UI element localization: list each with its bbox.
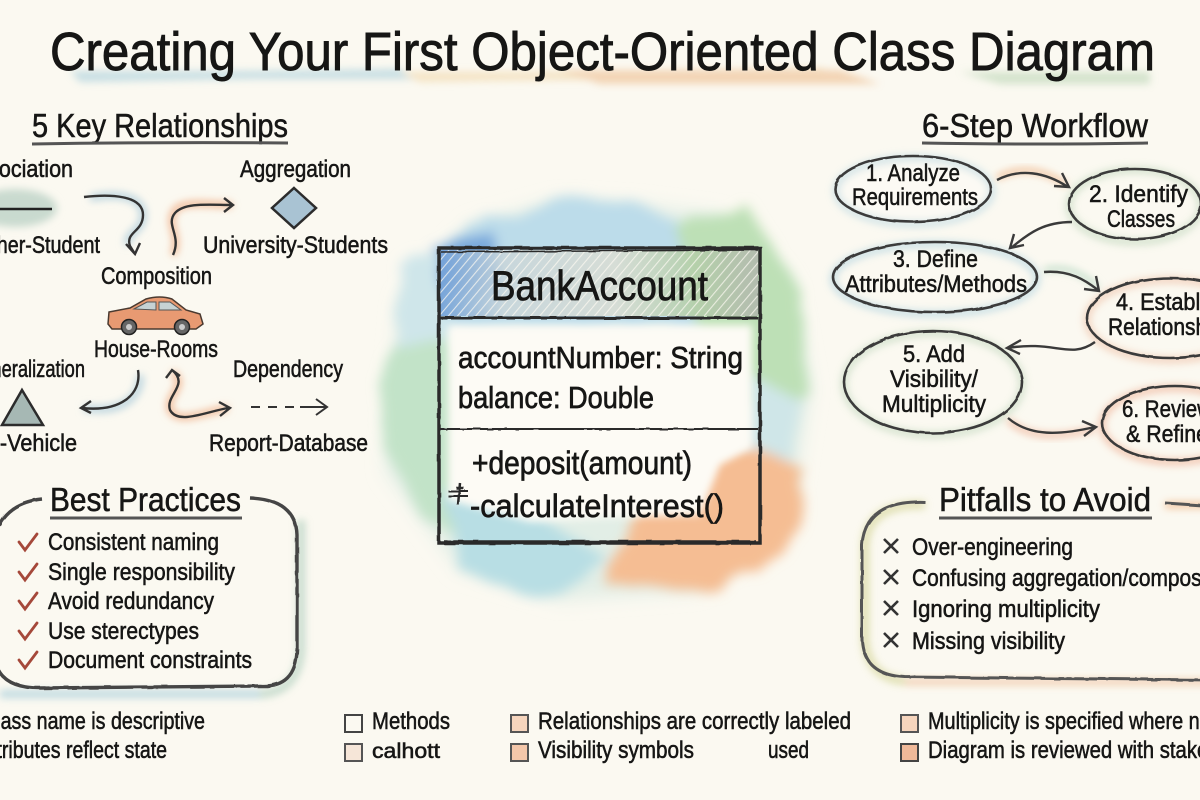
step 2: Classes	[1107, 206, 1175, 233]
checklist column 1	[0, 708, 205, 764]
checklist column 4	[901, 708, 1200, 764]
heading: 6-step workflow: 6-Step Workflow	[922, 107, 1148, 144]
list: best practices: Use sterectypes	[48, 618, 199, 645]
dependency: label and dashed arrow: Dependency	[233, 356, 343, 383]
aggregation: label and diamond: University-Students	[203, 232, 388, 259]
attributes: accountNumber: String	[458, 340, 743, 375]
checklist	[0, 708, 1200, 764]
arrow: step 2 to 3	[1010, 222, 1072, 248]
dependency: label and dashed arrow	[209, 356, 368, 457]
step 6	[1102, 386, 1200, 462]
methods	[470, 445, 724, 524]
step 5: Visibility/	[890, 366, 978, 393]
association: label and line	[0, 156, 100, 259]
methods: +deposit(amount)	[472, 445, 692, 481]
checklist column 2	[345, 708, 450, 763]
arrow: step 3 to 4	[1044, 269, 1099, 291]
arrow: step 5 to 6	[1008, 418, 1096, 436]
arrow: composition to generalization	[81, 370, 140, 413]
composition: label, car icon	[94, 263, 218, 363]
list: best practices: Consistent naming	[48, 529, 219, 556]
step 5: 5. Add	[903, 341, 965, 368]
step 3: 3. Define	[893, 246, 978, 273]
aggregation: label and diamond: Aggregation	[240, 156, 351, 183]
step 1: Requirements	[852, 184, 978, 211]
list: pitfalls	[884, 534, 1200, 655]
list: best practices: Document constraints	[48, 647, 252, 674]
step 5: Multiplicity	[882, 391, 986, 418]
panel: 6-step workflow	[833, 107, 1200, 462]
arrow: step 4 to 5	[1007, 340, 1095, 354]
step 2: 2. Identify	[1089, 181, 1188, 208]
generalization: label and triangle	[0, 356, 85, 457]
step 2	[1069, 169, 1200, 242]
panel: best practices	[0, 481, 301, 694]
step 1	[835, 156, 992, 224]
step 1: 1. Analyze	[866, 160, 960, 187]
checklist column 3: Visibility symbols	[538, 737, 694, 764]
watercolor wash behind class	[382, 198, 810, 600]
methods: -calculateInterest()	[470, 488, 724, 524]
composition: label, car icon: Composition	[101, 263, 212, 290]
class diagram: BankAccount	[439, 248, 760, 543]
list: best practices: Avoid redundancy	[48, 588, 214, 615]
step 5	[844, 331, 1022, 435]
attributes: balance: Double	[458, 380, 654, 415]
list: pitfalls: Ignoring multiplicity	[912, 596, 1100, 623]
checklist column 3: Relationships are correctly labeled	[538, 708, 851, 735]
list: pitfalls: Missing visibility	[912, 628, 1065, 655]
class name: BankAccount	[491, 262, 708, 309]
checklist column 3: used	[768, 737, 809, 764]
checklist column 2: calhott	[372, 740, 440, 763]
arrow: step 1 to 2	[997, 171, 1069, 187]
list: best practices: Single responsibility	[48, 559, 235, 586]
heading: pitfalls to avoid: Pitfalls to Avoid	[939, 481, 1151, 518]
heading: best practices: Best Practices	[50, 481, 241, 518]
heading: 5 key relationships: 5 Key Relationships	[32, 107, 288, 144]
composition: label, car icon: House-Rooms	[94, 336, 218, 363]
arrow: composition to dependency	[166, 370, 230, 417]
panel: 5 key relationships	[0, 107, 388, 457]
list: best practices	[19, 529, 252, 674]
panel: pitfalls to avoid	[862, 481, 1200, 682]
list: pitfalls: Over-engineering	[912, 534, 1073, 561]
attributes	[458, 340, 743, 415]
dependency: label and dashed arrow: Report-Database	[209, 430, 368, 457]
step 3	[833, 242, 1037, 314]
checklist column 3	[511, 708, 851, 764]
arrow: association to composition	[84, 196, 143, 254]
step 3: Attributes/Methods	[845, 271, 1027, 298]
step 4	[1087, 278, 1200, 360]
aggregation: label and diamond	[203, 156, 388, 259]
arrow: composition to aggregation	[172, 198, 233, 255]
checklist column 2: Methods	[372, 708, 450, 735]
